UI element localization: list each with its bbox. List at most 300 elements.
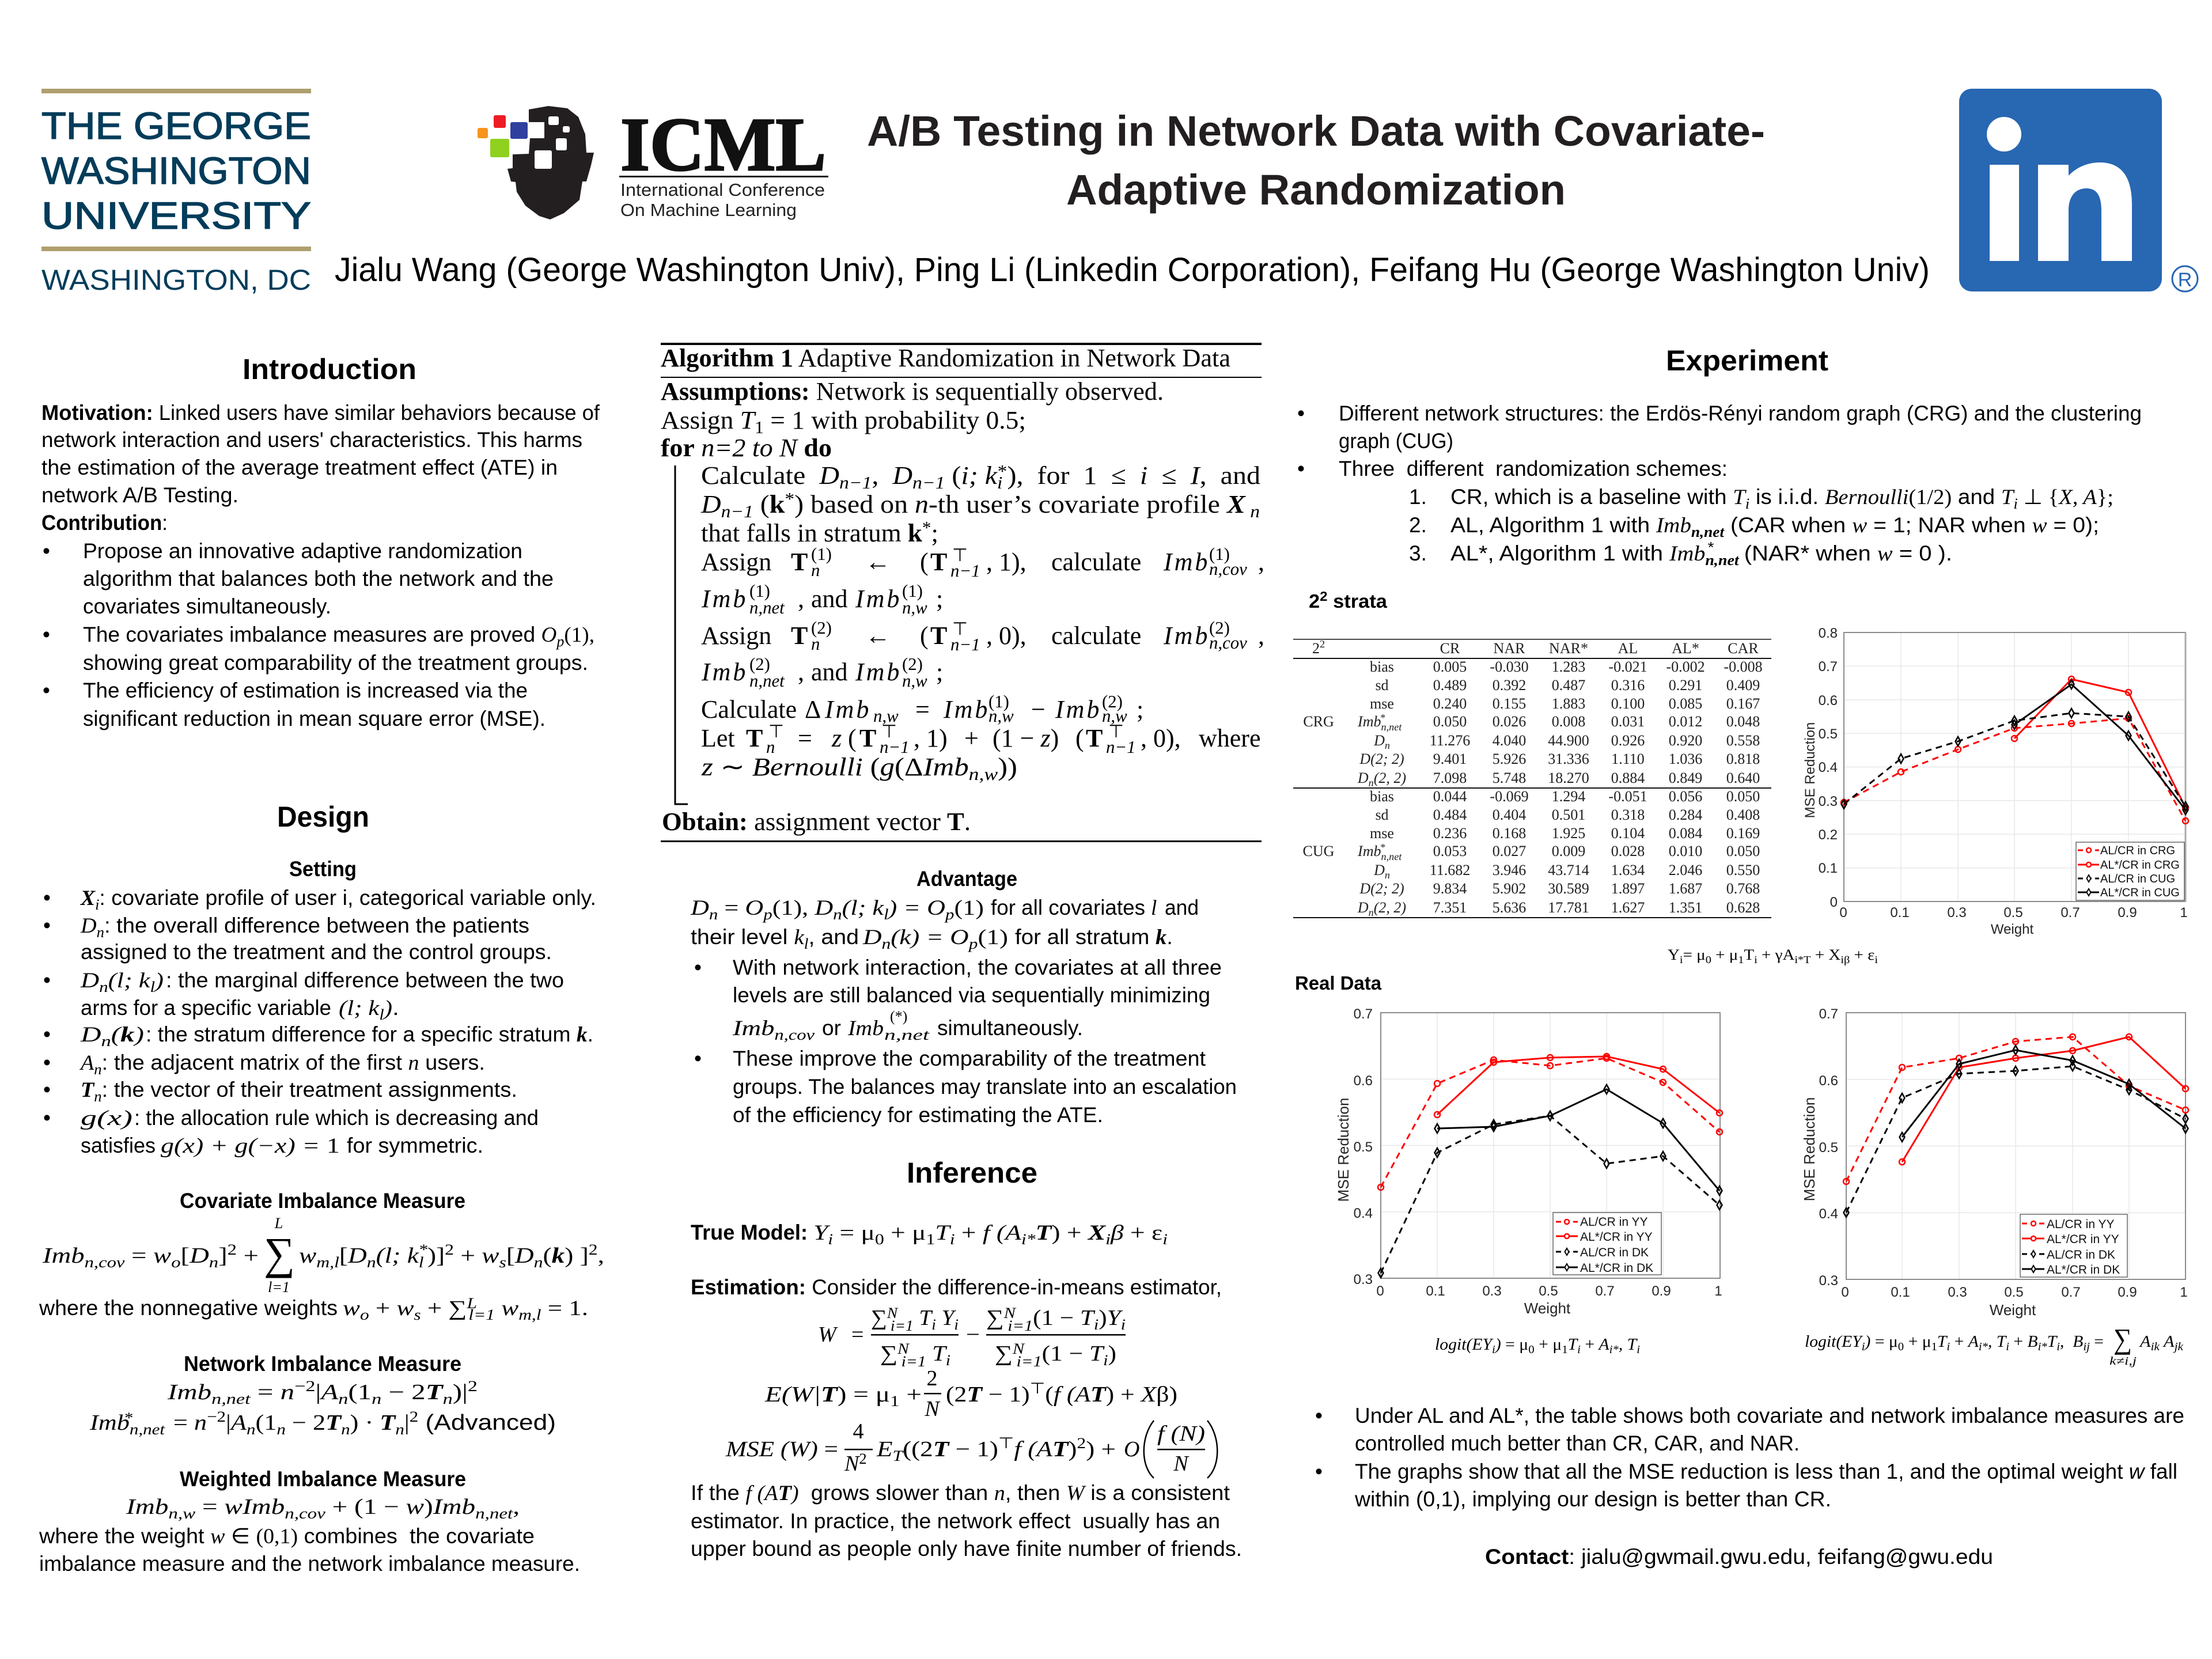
- line chart: CRG and CUG: 0.3: [1947, 905, 1967, 921]
- step: assignment rule: n−1: [1106, 737, 1136, 757]
- algorithm body: i: [997, 473, 1002, 493]
- formula: logit model right: A: [2160, 1333, 2175, 1351]
- table rows: CRG: D: [1373, 732, 1390, 751]
- formula: network imbalance: −2: [207, 1408, 226, 1425]
- series: AL*/CR in CRG: [2012, 676, 2188, 810]
- heading: Inference: Inference: [907, 1157, 1037, 1189]
- line chart: real data right: 0.9: [2118, 1285, 2137, 1300]
- formula: estimator W: T: [926, 1342, 948, 1366]
- formula: covariate imbalance: 2: [589, 1241, 598, 1258]
- text block: setting definitions: ): [382, 997, 392, 1020]
- table rows: CRG: 0.392: [1493, 677, 1526, 694]
- logo: George Washington University: [41, 89, 311, 296]
- table rows: CRG: 0.026: [1493, 713, 1526, 730]
- chart legend: AL*/CR in DK: [2047, 1263, 2120, 1277]
- step: assign treatment 1: Assign: [701, 548, 771, 576]
- formula: estimator W: i=1: [891, 1317, 914, 1334]
- step: assign treatment 1: T: [930, 548, 947, 576]
- step: assign treatment 1: calculate: [1051, 548, 1141, 576]
- table rows: CUG: 0.010: [1669, 843, 1702, 859]
- text block: weights note: L: [466, 1295, 477, 1312]
- line chart: CRG and CUG: 0: [1830, 895, 1838, 910]
- algorithm body: k: [770, 490, 785, 518]
- formula: weighted imbalance: w)Imb: [406, 1495, 467, 1519]
- algorithm body: )): [998, 753, 1017, 781]
- formula: estimator W: ∑: [986, 1306, 1002, 1330]
- formula: network imbalance: n: [341, 1421, 350, 1438]
- text block: weights note: [39, 1295, 588, 1323]
- formula: simulation model: iβ: [1840, 954, 1850, 965]
- step: imbalance difference: (1): [988, 692, 1009, 711]
- table rows: CUG: 0.050: [1726, 788, 1760, 805]
- algorithm body: n-th user’s covariate profile X: [915, 490, 1244, 518]
- formula: true model: 1: [926, 1231, 935, 1248]
- table rows: CRG: 0.050: [1433, 713, 1467, 730]
- step: imbalance difference: (2): [1102, 692, 1123, 711]
- algorithm body: *: [922, 518, 931, 537]
- line chart: real data right: 0: [1841, 1285, 1849, 1300]
- formula: weighted imbalance: n,w: [168, 1505, 195, 1522]
- text block: conclusions: •: [1315, 1404, 1323, 1427]
- text block: motivation: network A/B Testing.: [41, 483, 238, 507]
- logo: George Washington University: THE GEORGE: [41, 104, 311, 147]
- table rows: CRG: 0.100: [1611, 695, 1645, 712]
- line chart: CRG and CUG: 1: [2180, 905, 2188, 921]
- text block: contribution: •: [43, 679, 50, 702]
- formula: logit model right: ∑: [2113, 1323, 2132, 1355]
- series: AL/CR in YY: [1843, 1034, 2188, 1184]
- text block: conclusions: The graphs show that all the MSE reduction is less than 1, and the optimal weight w fall: [1355, 1460, 2177, 1483]
- formula: weighted imbalance: Imb: [126, 1495, 168, 1519]
- table rows: CUG: -0.051: [1608, 788, 1647, 805]
- formula: covariate imbalance: l: [419, 1253, 424, 1271]
- text block: motivation: network interaction and users' characteristics. This harms: [41, 428, 582, 452]
- text block: contribution: significant reduction in mean square error (MSE).: [83, 707, 546, 730]
- formula: simulation model: i: [1874, 954, 1878, 965]
- text block: experiment setup: *: [1708, 540, 1714, 556]
- chart legend: AL*/CR in YY: [1580, 1230, 1653, 1244]
- inline formula line: n,cov: [774, 1027, 815, 1043]
- formula: conditional expectation: (2T − 1): [946, 1382, 1024, 1407]
- table rows: CRG: 0.818: [1726, 751, 1760, 767]
- line chart: real data left: 0.5: [1539, 1283, 1558, 1299]
- table rows: CRG: -0.002: [1666, 658, 1705, 675]
- step: assign treatment 1: T: [791, 548, 808, 576]
- inline formula line: simultaneously.: [937, 1016, 1083, 1040]
- formula: conditional expectation: 2: [926, 1366, 938, 1391]
- text block: weights note: where the nonnegative weights: [39, 1296, 338, 1320]
- algorithm body: n: [1245, 502, 1260, 521]
- formula: logit model right: i: [2006, 1341, 2009, 1353]
- step: assign treatment 2: (: [920, 622, 929, 650]
- table rows: CUG: bias: [1370, 788, 1394, 805]
- formula: estimator W: i: [1121, 1316, 1126, 1333]
- series: AL/CR in CRG: [1841, 715, 2188, 824]
- step: assign treatment 2: ←: [865, 622, 891, 650]
- table header: 2: [1320, 638, 1325, 650]
- text block: experiment setup: i: [2013, 495, 2018, 512]
- table header: 2: [1312, 638, 1325, 657]
- formula: estimator W: (1 −: [1033, 1306, 1080, 1330]
- formula: covariate imbalance: ∑: [264, 1228, 295, 1278]
- algorithm body: Calculate D: [701, 461, 838, 490]
- table rows: CUG: D(2; 2): [1359, 880, 1404, 897]
- text block: experiment setup: 1.: [1409, 485, 1427, 509]
- text block: contribution: covariates simultaneously.: [83, 594, 331, 618]
- text block: weights note: w: [396, 1297, 414, 1320]
- formula: simulation model: = μ: [1683, 946, 1706, 963]
- formula: mean square error: ) +: [1086, 1437, 1116, 1461]
- formula: network imbalance: −2: [294, 1377, 316, 1395]
- algorithm body: n,w: [969, 764, 998, 784]
- step: assign treatment 1: n,cov: [1209, 559, 1247, 579]
- text block: setting definitions: [43, 886, 596, 1158]
- step: assign treatment 1: (1): [749, 581, 770, 601]
- text block: contribution: •: [43, 623, 50, 646]
- step: assign treatment 1: Imb: [855, 585, 902, 613]
- step: assign treatment 2: Imb: [701, 658, 748, 686]
- line chart: real data left: 0.9: [1652, 1283, 1671, 1299]
- line chart: CRG and CUG: 0.1: [1819, 861, 1838, 876]
- text block: setting definitions: : the overall difference between the patients: [104, 914, 529, 937]
- table rows: CRG: 0.291: [1669, 677, 1702, 694]
- table rows: CUG: 17.781: [1548, 899, 1589, 916]
- table rows: CRG: 0.167: [1726, 695, 1760, 712]
- table rows: CRG: [1303, 658, 1763, 789]
- line chart: real data left: 0.6: [1354, 1073, 1373, 1089]
- text block: advantage: D: [862, 926, 882, 949]
- text block: weight explanation: where the weight w ∈ (0,1) combines the covariate: [39, 1524, 535, 1548]
- algorithm title: Algorithm 1 Adaptive Randomization in Network Data: [661, 344, 1230, 372]
- text block: advantage: p: [944, 906, 955, 923]
- text block: setting definitions: : the allocation rule which is decreasing and: [134, 1106, 539, 1130]
- line chart: real data left: 0.3: [1354, 1272, 1373, 1287]
- table rows: CUG: 0.168: [1493, 825, 1526, 842]
- formula: logit model right: B: [2028, 1333, 2038, 1351]
- line chart: CRG and CUG: MSE Reduction: [1802, 722, 1818, 818]
- formula: estimator W: T: [914, 1306, 933, 1330]
- table rows: CRG: D(2; 2): [1359, 751, 1404, 767]
- formula: network imbalance: (1: [255, 1411, 276, 1435]
- step: assignment rule: T: [746, 724, 763, 752]
- table rows: CUG: 0.028: [1611, 843, 1645, 859]
- formula: covariate imbalance: D: [514, 1244, 534, 1268]
- step: assign treatment 2: Imb: [1163, 622, 1210, 650]
- formula: network imbalance: |: [316, 1380, 321, 1404]
- formula: covariate imbalance: o: [171, 1253, 181, 1271]
- text block: weights note: m,l: [518, 1306, 541, 1323]
- logo: ICML: ICML: [620, 102, 826, 187]
- formula: logit model left: +: [1581, 1336, 1599, 1354]
- formula: estimator W: −: [966, 1323, 980, 1347]
- formula: covariate imbalance: +: [237, 1244, 259, 1268]
- panel: center column: [690, 867, 1242, 1560]
- step: assign treatment 2: n,w: [902, 671, 927, 691]
- formula: weighted imbalance: + (1 −: [325, 1495, 406, 1519]
- line chart: CRG and CUG: 0.8: [1819, 626, 1838, 641]
- text block: estimation: Estimation: Consider the difference-in-means estimator,: [691, 1275, 1222, 1299]
- step: assignment rule: =: [798, 724, 812, 752]
- formula: covariate imbalance: n: [367, 1253, 376, 1271]
- algorithm body: z ∼ Bernoulli (g(ΔImb: [702, 753, 963, 781]
- step: assignment rule: ⊤: [768, 722, 784, 741]
- table rows: CRG: sd: [1375, 677, 1389, 694]
- formula: true model: T: [1036, 1221, 1052, 1245]
- table rows: CUG: 1.634: [1611, 862, 1645, 878]
- text block: experiment setup: X, A};: [2059, 486, 2113, 509]
- step: assign treatment 1: (1): [811, 544, 832, 564]
- table rows: CUG: [1303, 788, 1760, 918]
- table rows: CRG: 0.085: [1669, 695, 1702, 712]
- table rows: CRG: 5.748: [1493, 770, 1526, 786]
- table rows: CUG: 9.834: [1433, 880, 1467, 897]
- formula: logit model left: A: [1597, 1336, 1610, 1354]
- text block: weights note: w: [343, 1297, 360, 1320]
- table rows: CRG: -0.021: [1608, 658, 1647, 675]
- text block: setting definitions: n: [99, 979, 108, 995]
- text block: advantage: D: [690, 896, 709, 920]
- formula: true model: i: [950, 1231, 955, 1248]
- text block: advantage: p: [967, 935, 978, 952]
- text block: experiment setup: 2.: [1409, 513, 1427, 537]
- series: AL/CR in YY: [1378, 1055, 1722, 1190]
- text block: contribution: Propose an innovative adaptive randomization: [83, 539, 522, 563]
- line chart: real data left: [1335, 1006, 1722, 1317]
- formula: mean square error: T: [893, 1447, 904, 1464]
- formula: logit model left: = μ: [1505, 1336, 1527, 1354]
- text block: advantage: l: [884, 906, 889, 923]
- algorithm preamble: [661, 377, 1164, 462]
- table rows: CUG: 0.169: [1726, 825, 1760, 842]
- chart legend: AL/CR in YY: [1580, 1215, 1647, 1229]
- algorithm body: *: [998, 461, 1007, 481]
- formula: logit model right: ik: [2151, 1341, 2160, 1353]
- formula: simulation model: i*T: [1794, 954, 1811, 965]
- text block: setting definitions: D: [80, 1023, 101, 1047]
- formula: network imbalance: *: [124, 1409, 134, 1426]
- step: assign treatment 1: n,w: [902, 598, 927, 618]
- subheading: Weighted Imbalance Measure: Weighted Imbalance Measure: [180, 1467, 466, 1491]
- formula: mean square error: N: [844, 1452, 861, 1476]
- formula: true model: Y: [813, 1221, 830, 1245]
- formula: simulation model: 1: [1738, 954, 1744, 965]
- algorithm body: [700, 461, 1264, 784]
- logo: George Washington University: UNIVERSITY: [41, 194, 311, 237]
- step: assign treatment 1: ;: [936, 585, 943, 613]
- formula: network imbalance: ) ·: [350, 1411, 380, 1435]
- table rows: CRG: 44.900: [1548, 732, 1589, 749]
- inline formula line: (*): [890, 1008, 907, 1025]
- text block: advantage: n: [709, 906, 718, 923]
- step: assignment rule: (: [1075, 724, 1084, 752]
- table rows: CRG: 0.012: [1669, 713, 1702, 730]
- formula: weighted imbalance: n,net: [475, 1505, 513, 1522]
- text block: advantage: (1): [978, 926, 1008, 949]
- formula: covariate imbalance: w: [299, 1244, 317, 1268]
- text block: advantage: With network interaction, the covariates at all three: [733, 956, 1222, 979]
- formula: logit model right: +: [2009, 1333, 2028, 1351]
- step: assignment rule: ⊤: [881, 722, 897, 741]
- formula: mean square error: f (N): [1157, 1422, 1205, 1446]
- text block: consistency note: upper bound as people only have finite number of friends.: [691, 1537, 1242, 1560]
- formula: network imbalance: 2: [410, 1408, 418, 1425]
- formula: estimator W: i: [954, 1316, 959, 1333]
- formula: network imbalance: n: [443, 1390, 453, 1407]
- text block: experiment setup: (CAR when: [1724, 513, 1852, 537]
- table rows: CUG: 0.550: [1726, 862, 1760, 878]
- step: assign treatment 1: n−1: [950, 561, 980, 581]
- formula: network imbalance: − 2: [286, 1411, 325, 1435]
- formula: logit model left: 0: [1528, 1344, 1535, 1356]
- chart legend: AL*/CR in CRG: [2100, 859, 2180, 872]
- algorithm body: ) based on: [794, 490, 915, 518]
- text block: setting definitions: •: [43, 1051, 51, 1074]
- step: assign treatment 1: n: [811, 560, 820, 580]
- table rows: CRG: 0.489: [1433, 677, 1467, 694]
- step: assignment rule: where: [1199, 724, 1260, 752]
- table rows: CUG: n: [1385, 869, 1390, 881]
- table rows: CRG: 0.849: [1669, 770, 1702, 786]
- text block: experiment setup: •: [1297, 402, 1305, 425]
- formula: network imbalance: 2: [468, 1377, 478, 1395]
- formula: estimator W: W: [818, 1323, 838, 1347]
- formula: network imbalance: T: [325, 1411, 342, 1435]
- text block: contribution: Contribution:: [41, 511, 168, 535]
- formula: covariate imbalance: w: [153, 1244, 172, 1268]
- step: assign treatment 1: ,: [798, 585, 804, 613]
- text block: setting definitions: for symmetric.: [347, 1134, 483, 1157]
- text block: setting definitions: D: [80, 969, 99, 993]
- formula: simulation model: + μ: [1711, 946, 1738, 963]
- line chart: real data right: 0.7: [1819, 1006, 1838, 1022]
- step: assign treatment 2: (2): [749, 654, 770, 674]
- table rows: CRG: 7.098: [1433, 770, 1467, 786]
- step: assign treatment 1: , 1),: [986, 548, 1027, 576]
- formula: true model: = μ: [833, 1221, 875, 1245]
- formula: estimator W: i=1: [1017, 1353, 1042, 1370]
- algorithm preamble: for n=2 to N do: [661, 434, 832, 462]
- table header: NAR: [1494, 640, 1525, 657]
- step: assign treatment 2: n,net: [749, 671, 785, 691]
- text block: setting definitions: : covariate profile of user i, categorical variable only.: [99, 886, 596, 910]
- text block: experiment setup: Bernoulli(1/2) and T: [1825, 485, 2013, 509]
- logo: ICML: [478, 102, 828, 220]
- formula: covariate imbalance: )]: [427, 1244, 445, 1268]
- text block: consistency note: [691, 1481, 1242, 1560]
- table rows: CUG: 0.009: [1552, 843, 1585, 859]
- text block: setting definitions: .: [392, 996, 398, 1020]
- table rows: CRG: 1.110: [1611, 751, 1645, 767]
- line chart: real data left: 0: [1376, 1283, 1384, 1299]
- table: simulation results: [1293, 638, 1771, 918]
- formula: logit model left: i: [1577, 1344, 1581, 1356]
- text block: motivation: Motivation: Linked users have similar behaviors because of: [41, 401, 600, 425]
- formula: true model: 0: [875, 1231, 884, 1248]
- formula: conditional expectation: (: [1045, 1382, 1054, 1407]
- text block: contribution: The covariates imbalance measures are proved O: [83, 623, 556, 647]
- formula: estimator W: T: [1080, 1306, 1096, 1330]
- series: AL*/CR in DK: [1900, 1046, 2188, 1142]
- formula: covariate imbalance: n: [534, 1253, 543, 1271]
- step: assign treatment 1: (1): [1209, 544, 1230, 564]
- heading: Design: Design: [277, 801, 369, 833]
- table rows: CUG: 5.902: [1493, 880, 1526, 897]
- formula: estimator W: N: [897, 1340, 910, 1357]
- formula: network imbalance: (1: [348, 1380, 372, 1404]
- text block: setting definitions: A: [79, 1051, 94, 1075]
- formula: estimator W: ): [1108, 1342, 1116, 1366]
- formula: logit model right: [1805, 1323, 2183, 1368]
- text block: setting definitions: (: [111, 1023, 123, 1047]
- table rows: CRG: 0.005: [1433, 658, 1467, 675]
- text block: advantage: of the efficiency for estimating the ATE.: [733, 1103, 1103, 1127]
- algorithm preamble: Assign T: [661, 406, 754, 434]
- formula: estimator W: Y: [936, 1306, 956, 1330]
- step: assign treatment 1: ⊤: [952, 546, 968, 565]
- text block: advantage: These improve the comparability of the treatment: [733, 1047, 1206, 1070]
- formula: weighted imbalance: =: [195, 1495, 224, 1519]
- line chart: real data right: Weight: [1990, 1301, 2036, 1319]
- formula: network imbalance: A: [319, 1380, 339, 1404]
- line chart: real data left: 1: [1714, 1283, 1722, 1299]
- text block: advantage: l: [1151, 896, 1157, 920]
- formula: logit model right: ): [1863, 1333, 1870, 1351]
- formula: mean square error: 2: [1077, 1434, 1086, 1452]
- table rows: CUG: 0.501: [1552, 806, 1585, 823]
- text block: experiment setup: is i.i.d.: [1749, 485, 1825, 509]
- text block: advantage: ) = O: [887, 896, 945, 920]
- formula: true model: +: [955, 1221, 983, 1245]
- text block: setting definitions: •: [43, 1022, 51, 1046]
- formula: logit model right: i: [1862, 1341, 1865, 1353]
- formula: true model: [691, 1221, 1168, 1248]
- formula: mean square error: O: [1124, 1437, 1139, 1461]
- table rows: CRG: 0.558: [1726, 732, 1760, 749]
- step: assign treatment 2: (2): [1209, 618, 1230, 638]
- text block: advantage: =: [718, 896, 745, 920]
- panel: right column: [1293, 344, 2188, 1569]
- formula: estimator W: T: [1089, 1342, 1105, 1366]
- formula: mean square error: 4: [853, 1419, 864, 1444]
- formula: logit model right: = μ: [1874, 1333, 1896, 1351]
- formula: logit model right: A: [1967, 1333, 1979, 1351]
- inline formula line: or: [822, 1016, 841, 1040]
- step: assignment rule: T: [859, 724, 876, 752]
- text block: experiment setup: w = 0 ).: [1877, 541, 1948, 566]
- formula: conditional expectation: ⊤: [1030, 1380, 1045, 1397]
- step: assignment rule: Let: [701, 724, 735, 752]
- formula: logit model right: i: [2056, 1341, 2060, 1353]
- formula: conditional expectation: [764, 1366, 1177, 1421]
- table rows: CUG: (2, 2): [1374, 899, 1406, 916]
- text block: conclusions: within (0,1), implying our design is better than CR.: [1354, 1487, 1831, 1511]
- text block: weight explanation: imbalance measure and the network imbalance measure.: [39, 1552, 580, 1575]
- text block: contribution: algorithm that balances both the network and the: [83, 567, 554, 590]
- text block: advantage: and: [1165, 896, 1199, 919]
- table rows: CRG: 31.336: [1548, 751, 1589, 767]
- formula: estimator W: ∑: [880, 1342, 896, 1366]
- heading: Introduction: Introduction: [243, 353, 416, 385]
- chart legend: AL*/CR in DK: [1580, 1262, 1653, 1275]
- formula: logit model right: +: [1950, 1333, 1968, 1351]
- table rows: CUG: mse: [1370, 825, 1394, 842]
- chart legend: [2076, 842, 2184, 900]
- step: assign treatment 1: n,net: [749, 598, 785, 618]
- text block: experiment setup: Three different randomization schemes:: [1339, 457, 1728, 480]
- formula: true model: i*: [1021, 1231, 1036, 1248]
- step: imbalance difference: Δ: [805, 695, 821, 724]
- formula: logit model left: i*: [1609, 1344, 1619, 1356]
